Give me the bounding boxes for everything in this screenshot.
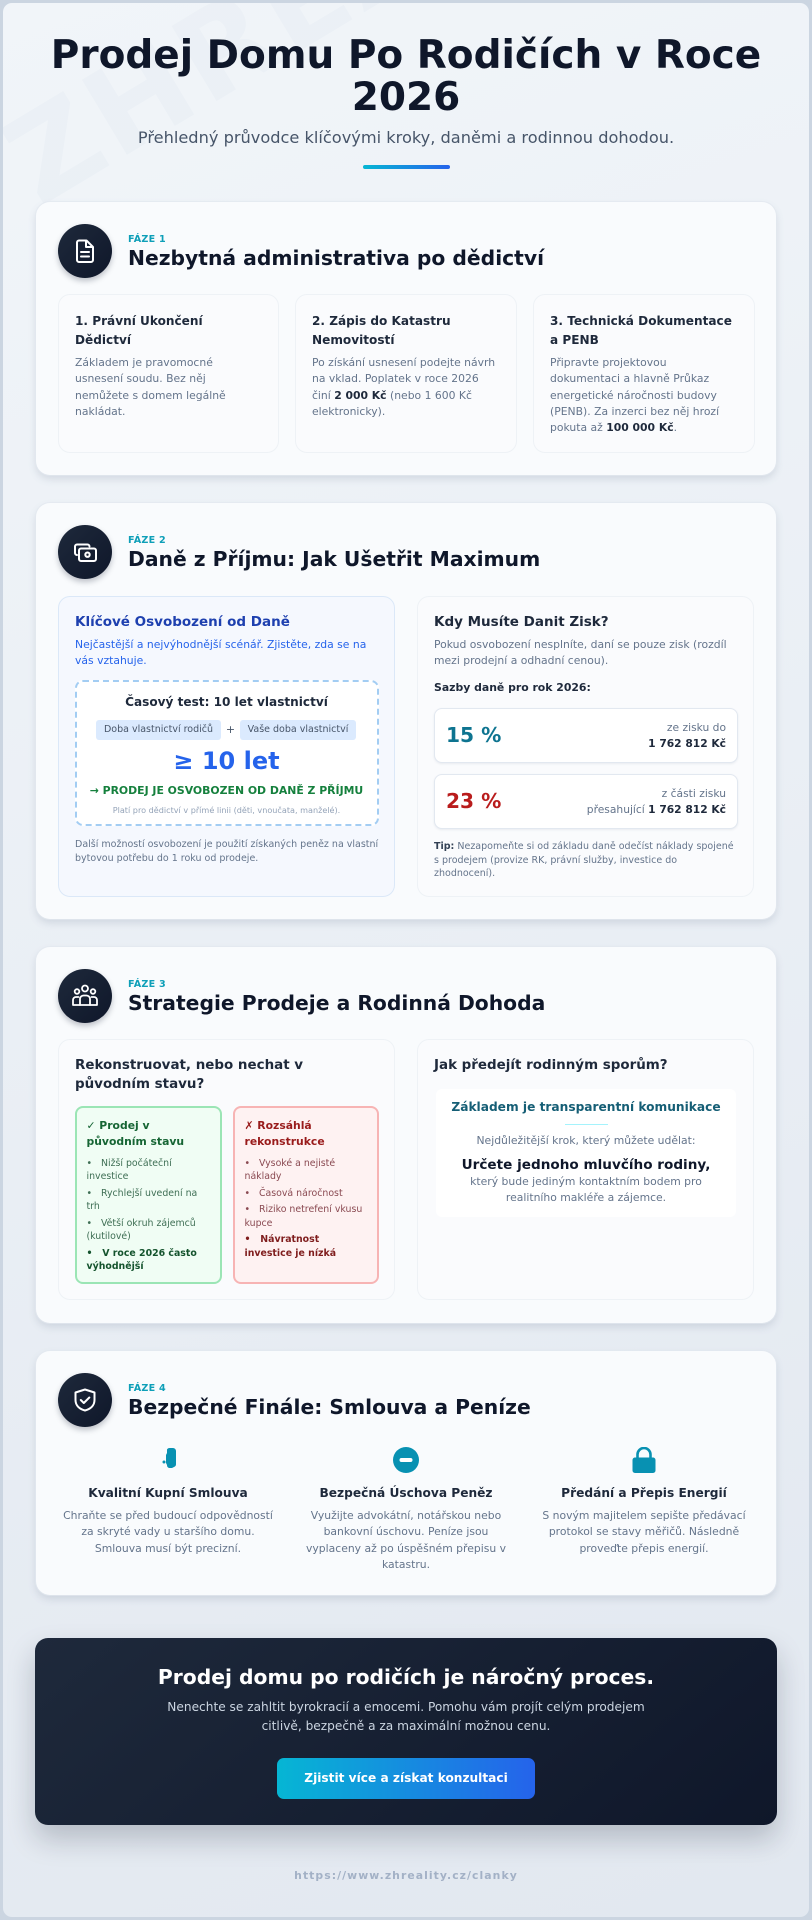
call to action panel bbox=[35, 1638, 777, 1824]
pill: yours: Vaše doba vlastnictví bbox=[248, 724, 348, 735]
step text: (PENB). Za inzerci bez něj hrozí bbox=[550, 405, 719, 418]
section title: Bezpečné Finále: Smlouva a Peníze bbox=[128, 1395, 531, 1419]
option: renovate bbox=[232, 1106, 379, 1284]
icon: people bbox=[58, 969, 112, 1023]
card: step 3 bbox=[533, 294, 754, 453]
card: step 2 bbox=[295, 294, 516, 453]
box heading: Základem je transparentní komunikace bbox=[451, 1100, 721, 1114]
advice detail: který bude jediným kontaktním bodem pro bbox=[470, 1175, 702, 1188]
step text: nemůžete s domem legálně bbox=[75, 388, 226, 402]
rate value: 23 % bbox=[446, 788, 501, 812]
rate value: 15 % bbox=[446, 723, 501, 747]
cta button: Zjistit více a získat konzultaci bbox=[304, 1770, 508, 1784]
option heading: rekonstrukce bbox=[244, 1135, 325, 1148]
option list: (kutilové) bbox=[86, 1231, 131, 1242]
question heading: původním stavu? bbox=[75, 1077, 204, 1092]
icon: lock bbox=[632, 1447, 656, 1473]
column heading: Kvalitní Kupní Smlouva bbox=[88, 1486, 248, 1500]
option list: • Rychlejší uvedení na bbox=[86, 1188, 197, 1199]
exemption intro: Nejčastější a nejvýhodnější scénář. Zjistěte, zda se na bbox=[75, 638, 366, 651]
panel: phase 4 bbox=[36, 1351, 776, 1595]
column heading: Předání a Přepis Energií bbox=[561, 1486, 727, 1500]
panel: taxing profit bbox=[417, 596, 754, 897]
column text: Chraňte se před budoucí odpovědností bbox=[63, 1509, 273, 1522]
step heading: 1. Právní Ukončení bbox=[75, 314, 203, 328]
column text: Využijte advokátní, notářskou nebo bbox=[311, 1509, 501, 1522]
exemption intro bbox=[75, 638, 366, 667]
question heading bbox=[75, 1058, 303, 1092]
tax heading: Kdy Musíte Danit Zisk? bbox=[434, 614, 609, 630]
column text: proveďte přepis energií. bbox=[579, 1542, 709, 1555]
rate condition: z části zisku bbox=[662, 786, 726, 800]
title: Prodej Domu Po Rodičích v Roce bbox=[51, 33, 761, 78]
advice detail bbox=[470, 1175, 702, 1204]
rate condition bbox=[587, 786, 726, 816]
tax intro: Pokud osvobození nesplníte, daní se pouze zisk (rozdíl bbox=[434, 638, 727, 651]
option heading: ✓ Prodej v bbox=[86, 1119, 150, 1132]
option list bbox=[244, 1158, 362, 1259]
card: step 1 bbox=[58, 294, 279, 453]
option list: • Riziko netrefení vkusu bbox=[244, 1204, 362, 1215]
option list: investice je nízká bbox=[244, 1248, 336, 1259]
icon: contract bbox=[162, 1448, 176, 1468]
short divider bbox=[565, 1124, 608, 1125]
question heading: Rekonstruovat, nebo nechat v bbox=[75, 1058, 303, 1073]
lead text: Nejdůležitější krok, který můžete udělat: bbox=[476, 1134, 696, 1147]
step text: činí 2 000 Kč (nebo 1 600 Kč bbox=[312, 388, 472, 402]
section heading bbox=[55, 969, 545, 1029]
step text: Připravte projektovou bbox=[550, 356, 667, 369]
tip bbox=[434, 841, 734, 879]
column text bbox=[63, 1509, 274, 1555]
accent bar bbox=[363, 165, 450, 169]
step text: nakládat. bbox=[75, 405, 125, 418]
option heading: původním stavu bbox=[86, 1135, 184, 1148]
step text: usnesení soudu. Bez něj bbox=[75, 372, 206, 385]
step text: pokuta až 100 000 Kč. bbox=[550, 421, 677, 434]
step text bbox=[550, 356, 720, 434]
phase label: FÁZE 1 bbox=[128, 234, 166, 245]
rate: 15 percent bbox=[434, 708, 738, 763]
step text: Po získání usnesení podejte návrh bbox=[312, 356, 495, 369]
step text bbox=[75, 356, 226, 418]
step heading bbox=[550, 314, 732, 347]
option list: náklady bbox=[244, 1171, 281, 1182]
section heading bbox=[55, 1373, 531, 1433]
tip: s prodejem (provize RK, právní služby, investice do bbox=[434, 855, 677, 866]
section heading bbox=[55, 224, 545, 284]
step text: Základem je pravomocné bbox=[75, 356, 213, 369]
time test box bbox=[74, 680, 378, 826]
cta text: Nenechte se zahltit byrokracií a emocemi. Pomohu vám projít celým prodejem bbox=[167, 1700, 645, 1714]
step heading bbox=[312, 314, 451, 347]
icon: document bbox=[58, 224, 112, 278]
exemption intro: vás vztahuje. bbox=[75, 654, 147, 667]
step text bbox=[312, 356, 495, 418]
result statement: → PRODEJ JE OSVOBOZEN OD DANĚ Z PŘÍJMU bbox=[90, 784, 363, 797]
step heading bbox=[75, 314, 204, 347]
rate condition: ze zisku do bbox=[667, 721, 726, 734]
option heading bbox=[244, 1119, 325, 1148]
phase label: FÁZE 3 bbox=[128, 979, 166, 990]
column: contract bbox=[63, 1448, 274, 1555]
step heading: 2. Zápis do Katastru bbox=[312, 314, 451, 328]
panel: family disputes bbox=[417, 1039, 754, 1300]
rate condition: přesahující 1 762 812 Kč bbox=[587, 802, 726, 816]
step heading: Dědictví bbox=[75, 333, 131, 347]
tax intro: mezi prodejní a odhadní cenou). bbox=[434, 654, 608, 667]
step heading: 3. Technická Dokumentace bbox=[550, 314, 732, 328]
panel: phase 3 bbox=[36, 947, 776, 1323]
fine print: Platí pro dědictví v přímé linii (děti, vnoučata, manželé). bbox=[113, 805, 340, 815]
advice detail: realitního makléře a zájemce. bbox=[506, 1191, 666, 1204]
column heading: Bezpečná Úschova Peněz bbox=[319, 1486, 493, 1500]
rate: 23 percent bbox=[434, 774, 738, 828]
column text: S novým majitelem sepište předávací bbox=[542, 1509, 746, 1522]
column text: katastru. bbox=[382, 1558, 430, 1571]
section title: Strategie Prodeje a Rodinná Dohoda bbox=[128, 991, 545, 1015]
option list: • Vysoké a nejisté bbox=[244, 1158, 335, 1169]
icon: money bbox=[58, 525, 112, 579]
key advice: Určete jednoho mluvčího rodiny, bbox=[462, 1157, 710, 1173]
step heading: a PENB bbox=[550, 333, 599, 347]
test title: Časový test: 10 let vlastnictví bbox=[125, 695, 328, 709]
column text: Smlouva musí být precizní. bbox=[95, 1542, 241, 1555]
column: handover bbox=[542, 1447, 746, 1555]
tax intro bbox=[434, 638, 727, 667]
column text: vyplaceny až po úspěšném přepisu v bbox=[306, 1542, 506, 1555]
option list: investice bbox=[86, 1171, 128, 1182]
step text: dokumentaci a hlavně Průkaz bbox=[550, 372, 709, 385]
phase label: FÁZE 2 bbox=[128, 535, 166, 546]
option list bbox=[86, 1158, 197, 1272]
rate condition bbox=[648, 721, 726, 750]
panel: renovate or not bbox=[58, 1039, 395, 1300]
option list: kupce bbox=[244, 1218, 272, 1229]
footer url: https://www.zhreality.cz/clanky bbox=[294, 1869, 518, 1882]
icon: shield bbox=[58, 1373, 112, 1427]
phase label: FÁZE 4 bbox=[128, 1383, 166, 1394]
rate condition: 1 762 812 Kč bbox=[648, 737, 726, 750]
step heading: Nemovitostí bbox=[312, 333, 394, 347]
step text: na vklad. Poplatek v roce 2026 bbox=[312, 372, 479, 385]
cta text: citlivě, bezpečně a za maximální možnou cenu. bbox=[262, 1719, 550, 1733]
option list: • Větší okruh zájemců bbox=[86, 1218, 196, 1229]
exemption note: Další možností osvobození je použití získaných peněz na vlastní bbox=[75, 839, 378, 850]
pill: parents bbox=[96, 720, 221, 740]
rates label: Sazby daně pro rok 2026: bbox=[434, 681, 591, 694]
cta heading: Prodej domu po rodičích je náročný proces. bbox=[158, 1665, 654, 1689]
exemption note bbox=[75, 839, 378, 864]
column text bbox=[542, 1509, 746, 1555]
tip: Tip: Nezapomeňte si od základu daně odečíst náklady spojené bbox=[434, 841, 734, 852]
panel: phase 1 bbox=[36, 202, 776, 475]
formula pills bbox=[96, 720, 356, 740]
panel: exemption bbox=[58, 596, 395, 897]
title bbox=[51, 33, 761, 120]
pill: parents: Doba vlastnictví rodičů bbox=[104, 724, 213, 735]
section title: Nezbytná administrativa po dědictví bbox=[128, 246, 544, 270]
column text: protokol se stavy měřičů. Následně bbox=[549, 1525, 739, 1538]
option list: • Návratnost bbox=[244, 1234, 319, 1245]
plus sign: + bbox=[226, 723, 235, 736]
exemption heading: Klíčové Osvobození od Daně bbox=[75, 614, 290, 630]
icon: escrow bbox=[393, 1447, 419, 1473]
option: keep as is bbox=[74, 1106, 222, 1284]
column text: bankovní úschovu. Peníze jsou bbox=[324, 1525, 488, 1538]
step text: energetické náročnosti budovy bbox=[550, 388, 717, 402]
pill: yours bbox=[240, 720, 356, 740]
option heading bbox=[86, 1119, 184, 1148]
option list: • Časová náročnost bbox=[244, 1188, 343, 1199]
disputes heading: Jak předejít rodinným sporům? bbox=[434, 1058, 668, 1073]
section heading bbox=[55, 525, 540, 585]
option heading: ✗ Rozsáhlá bbox=[244, 1119, 312, 1132]
option list: výhodnější bbox=[86, 1261, 144, 1272]
option list: • V roce 2026 často bbox=[86, 1248, 197, 1259]
column text: za skryté vady u staršího domu. bbox=[81, 1525, 255, 1538]
exemption note: bytovou potřebu do 1 roku od prodeje. bbox=[75, 853, 258, 864]
option list: • Nižší počáteční bbox=[86, 1158, 172, 1169]
tip: zhodnocení). bbox=[434, 868, 495, 879]
cta text bbox=[167, 1700, 645, 1733]
section title: Daně z Příjmu: Jak Ušetřit Maximum bbox=[128, 547, 540, 571]
panel: phase 2 bbox=[36, 503, 776, 919]
column text bbox=[306, 1509, 506, 1571]
communication box bbox=[436, 1089, 736, 1217]
column: escrow bbox=[306, 1447, 506, 1571]
title: 2026 bbox=[352, 75, 460, 120]
cta button bbox=[277, 1758, 535, 1798]
option list: trh bbox=[86, 1201, 100, 1212]
step text: elektronicky). bbox=[312, 405, 385, 418]
header bbox=[51, 33, 761, 169]
subtitle: Přehledný průvodce klíčovými kroky, daněmi a rodinnou dohodou. bbox=[138, 128, 674, 147]
result: ≥ 10 let bbox=[173, 747, 280, 775]
